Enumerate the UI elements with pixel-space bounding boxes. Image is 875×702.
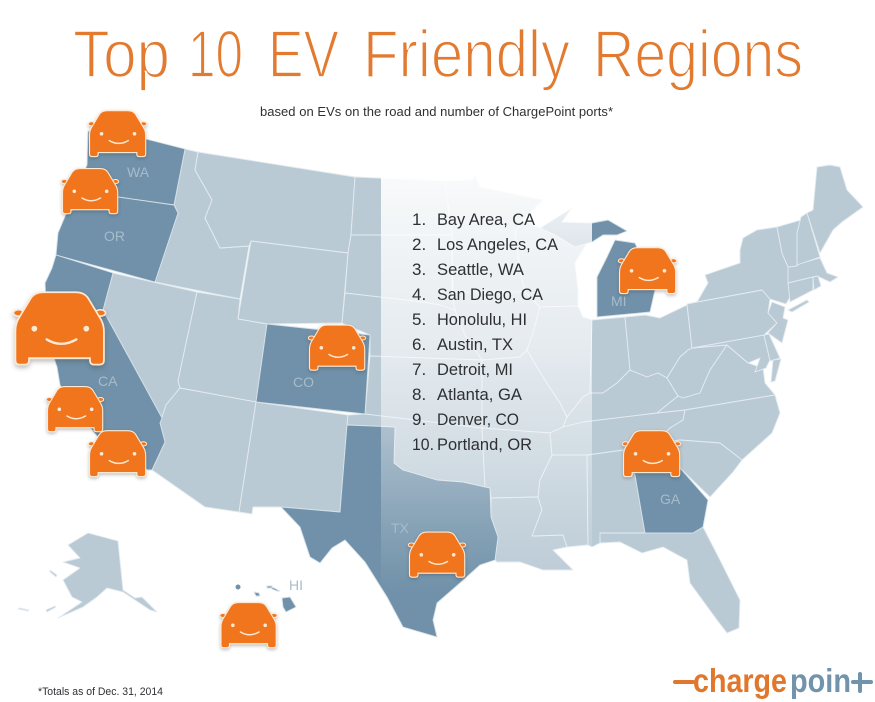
title: Friendly — [363, 17, 570, 92]
list item 3: 3. — [412, 260, 426, 279]
list item 9: 9. — [412, 410, 426, 429]
list item 8: Atlanta, GA — [437, 385, 523, 404]
non-highlighted states — [103, 149, 863, 633]
icon: car Honolulu — [220, 603, 277, 648]
list item 1: 1. — [412, 210, 426, 229]
icon: car San Diego — [88, 431, 147, 477]
title: 10 — [188, 17, 243, 92]
highlighted states — [45, 131, 708, 637]
list item 1: Bay Area, CA — [437, 210, 536, 229]
ranked list — [412, 210, 559, 454]
icon: car Bay Area (large) — [13, 292, 106, 365]
title: EV — [268, 17, 339, 92]
label: MI: MI — [611, 293, 627, 309]
icon: car Los Angeles — [46, 387, 104, 432]
list item 6: Austin, TX — [437, 335, 513, 354]
list item 10: 10. — [412, 435, 434, 454]
icon: car Portland — [61, 169, 119, 214]
map: United States — [18, 131, 863, 637]
list item 2: 2. — [412, 235, 426, 254]
label: HI: HI — [289, 577, 303, 593]
label: GA: GA — [660, 491, 681, 507]
logo: ChargePoint: poin — [790, 662, 851, 699]
logo: ChargePoint — [673, 662, 873, 699]
subtitle: based on EVs on the road and number of ChargePoint ports* — [260, 104, 613, 119]
list item 4: 4. — [412, 285, 426, 304]
title: Top — [73, 17, 170, 92]
footnote: *Totals as of Dec. 31, 2014 — [38, 686, 163, 698]
icon: car Atlanta — [622, 431, 681, 477]
label: CO: CO — [293, 374, 314, 390]
Alaska — [18, 533, 157, 618]
list item 4: San Diego, CA — [437, 285, 544, 304]
list item 5: 5. — [412, 310, 426, 329]
icon: car Seattle — [88, 111, 147, 157]
fade overlay behind list — [381, 175, 592, 592]
label: CA: CA — [98, 373, 118, 389]
logo: ChargePoint: charge — [693, 662, 787, 699]
list item 7: 7. — [412, 360, 426, 379]
list item 7: Detroit, MI — [437, 360, 513, 379]
icon: car Denver — [308, 325, 366, 370]
state labels — [98, 164, 681, 593]
icon: car Austin — [408, 532, 466, 577]
list item 9: Denver, CO — [437, 410, 519, 429]
label: WA: WA — [127, 164, 150, 180]
list item 8: 8. — [412, 385, 426, 404]
list item 2: Los Angeles, CA — [437, 235, 559, 254]
title: Regions — [593, 17, 803, 92]
label: OR: OR — [104, 228, 125, 244]
icon: car Detroit — [618, 248, 677, 294]
label: TX: TX — [391, 520, 410, 536]
list item 3: Seattle, WA — [437, 260, 525, 279]
list item 6: 6. — [412, 335, 426, 354]
Hawaii — [236, 584, 296, 612]
list item 10: Portland, OR — [437, 435, 532, 454]
list item 5: Honolulu, HI — [437, 310, 527, 329]
